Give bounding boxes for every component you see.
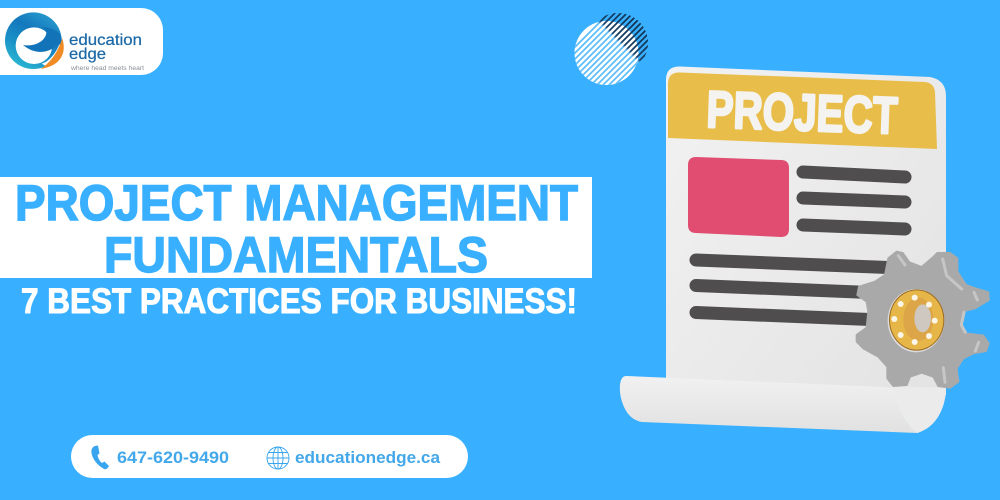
website: educationedge.ca xyxy=(295,448,441,467)
paper curl front xyxy=(620,376,919,433)
contact pill xyxy=(71,435,468,478)
gear highlights xyxy=(898,256,979,382)
contact bar xyxy=(71,435,468,478)
white title panel xyxy=(0,177,592,278)
title banner xyxy=(0,175,592,283)
gear xyxy=(857,252,989,388)
logo wordmark second line: edge xyxy=(69,46,106,63)
pink image block xyxy=(688,157,789,237)
subtitle: 7 BEST PRACTICES FOR BUSINESS! xyxy=(21,282,577,321)
illustration: project document with gear xyxy=(620,66,989,433)
decorative striped circle xyxy=(574,13,648,85)
gear hub xyxy=(888,289,944,352)
phone number: 647-620-9490 xyxy=(117,448,229,467)
icon: globe xyxy=(267,447,289,469)
header word: PROJECT xyxy=(706,81,899,146)
title line 2: FUNDAMENTALS xyxy=(104,227,488,283)
icon: education edge swirl xyxy=(5,12,67,72)
logo wordmark: education xyxy=(69,32,142,49)
gear body xyxy=(857,252,989,388)
yellow header band xyxy=(668,72,937,149)
logo tagline: where head meets heart xyxy=(70,65,144,72)
logo panel xyxy=(0,8,163,75)
paper sheet xyxy=(666,66,946,425)
icon: phone xyxy=(91,446,109,469)
title line 1: PROJECT MANAGEMENT xyxy=(15,175,578,231)
logo badge xyxy=(0,8,163,75)
paper curl inner xyxy=(890,386,946,433)
text lines xyxy=(696,172,905,320)
